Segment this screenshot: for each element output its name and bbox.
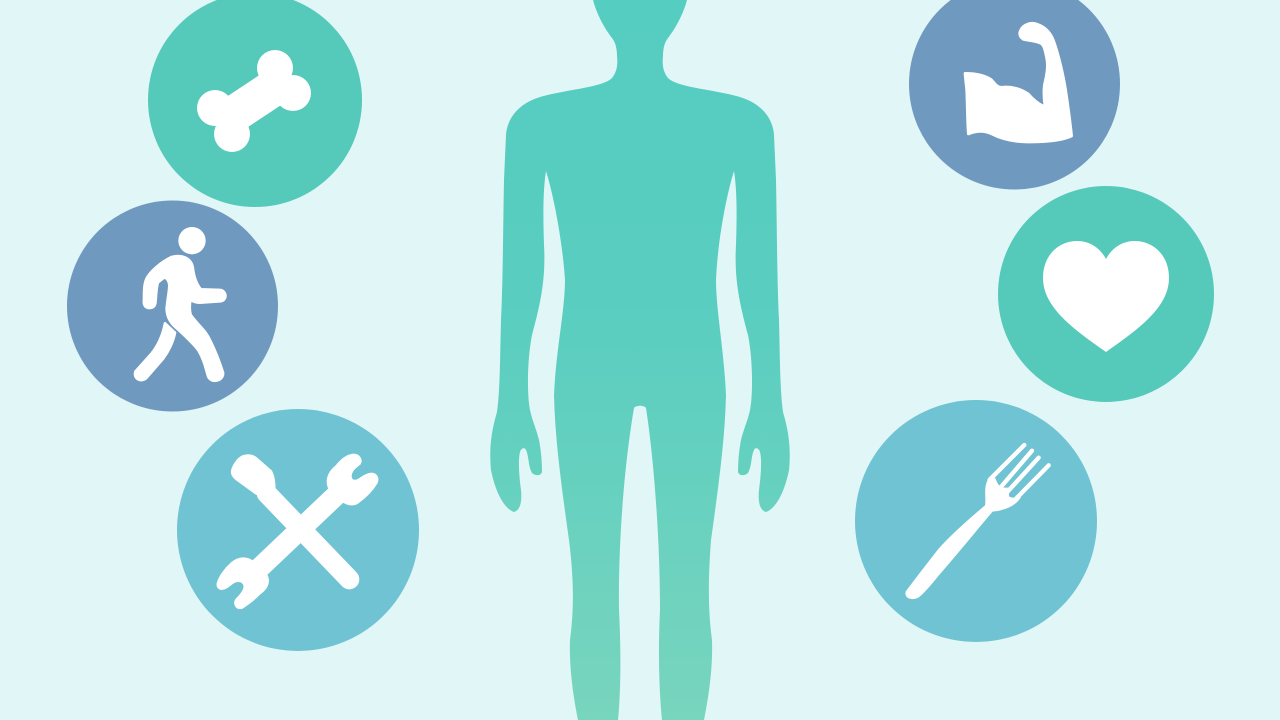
icon: fork xyxy=(906,445,1049,598)
icon: crossed wrench and screwdriver xyxy=(218,455,377,607)
icon: bone xyxy=(197,50,311,152)
circle: tools xyxy=(177,409,419,651)
circle: heart xyxy=(998,186,1214,402)
circle: fork xyxy=(855,400,1097,642)
circle: bone xyxy=(148,0,362,207)
circle: walking person xyxy=(67,200,278,412)
icon: heart xyxy=(1043,241,1169,352)
icon: walking person xyxy=(135,227,225,380)
human silhouette xyxy=(490,0,790,720)
icon: flexed arm xyxy=(965,23,1072,142)
circle: muscle xyxy=(909,0,1120,190)
